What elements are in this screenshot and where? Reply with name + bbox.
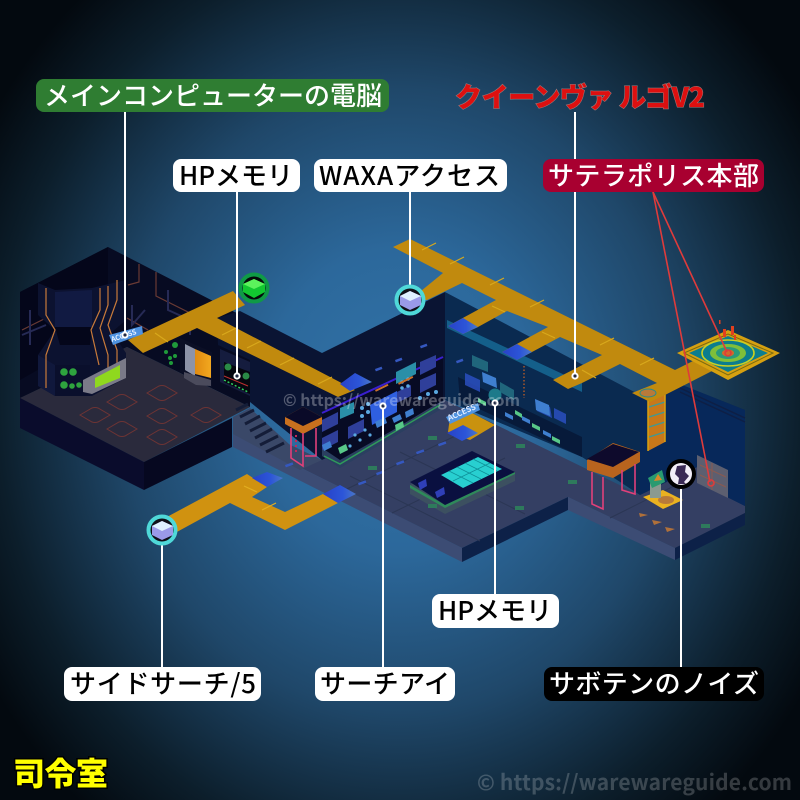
center watermark: © https://warewareguide.com — [283, 387, 520, 411]
panel: central dark wall — [217, 292, 445, 460]
floor markers — [80, 386, 221, 444]
panel: command console — [322, 355, 443, 468]
floor front faces — [233, 434, 462, 562]
label: メインコンピューターの電脳: メインコンピューターの電脳 — [44, 76, 382, 113]
icon: HP memory panel — [220, 349, 250, 396]
panel: upper-left yellow path — [128, 291, 372, 397]
label: サボテンのノイズ: サボテンのノイズ — [549, 664, 759, 701]
panel: upper-right yellow path — [393, 239, 712, 402]
panel: tactical table — [410, 451, 515, 514]
label: WAXAアクセス: WAXAアクセス — [319, 156, 500, 193]
wall conduits — [22, 264, 205, 330]
icon: green gem — [240, 274, 268, 302]
icon: left gate — [285, 407, 322, 466]
title: 司令室: 司令室 — [13, 749, 108, 795]
panel: lower-left yellow path — [165, 472, 356, 533]
leader lines — [125, 112, 681, 668]
icon: right gate — [587, 443, 640, 509]
panel: main lower floor — [233, 400, 745, 562]
icon: blue gem lower — [148, 516, 176, 544]
panel: left computer room — [20, 247, 250, 490]
panel: access yellow path: ACCESS — [445, 401, 478, 424]
icon: access tag at main computer: ACCESS — [109, 327, 138, 345]
icon: orange capsule door — [164, 338, 212, 388]
icon: cactus terminal — [643, 470, 683, 509]
label: サーチアイ: サーチアイ — [320, 664, 450, 701]
label: HPメモリ lower: HPメモリ — [438, 591, 552, 628]
label: HPメモリ upper: HPメモリ — [179, 156, 293, 193]
icon: ladder — [648, 393, 665, 451]
panel: access yellow path — [445, 401, 495, 441]
label: サテラポリス本部: サテラポリス本部 — [548, 156, 759, 193]
icon: floor arrows — [639, 513, 675, 532]
icon: cactus noise — [666, 459, 696, 489]
title: クイーンヴァルゴV2: クイーンヴァ ルゴV2 — [455, 76, 705, 115]
icon: main computer tower — [38, 280, 126, 396]
icon: helipad Satellapolis — [677, 330, 780, 380]
floor details — [368, 436, 710, 528]
footer watermark: © https://warewareguide.com — [477, 767, 792, 797]
red callout lines: サテラポリス本部 — [653, 192, 731, 486]
pin markers — [122, 332, 578, 409]
icon: stairs — [236, 404, 284, 452]
icon: blue gem upper — [396, 286, 424, 314]
panel: right blue wall — [445, 292, 745, 506]
stair marker — [340, 373, 372, 391]
icon: red towers on helipad — [719, 320, 736, 340]
icon: grey sealed door — [697, 455, 728, 498]
stair markers — [448, 318, 478, 334]
label: サイドサーチ/5: サイドサーチ/5 — [70, 664, 256, 701]
